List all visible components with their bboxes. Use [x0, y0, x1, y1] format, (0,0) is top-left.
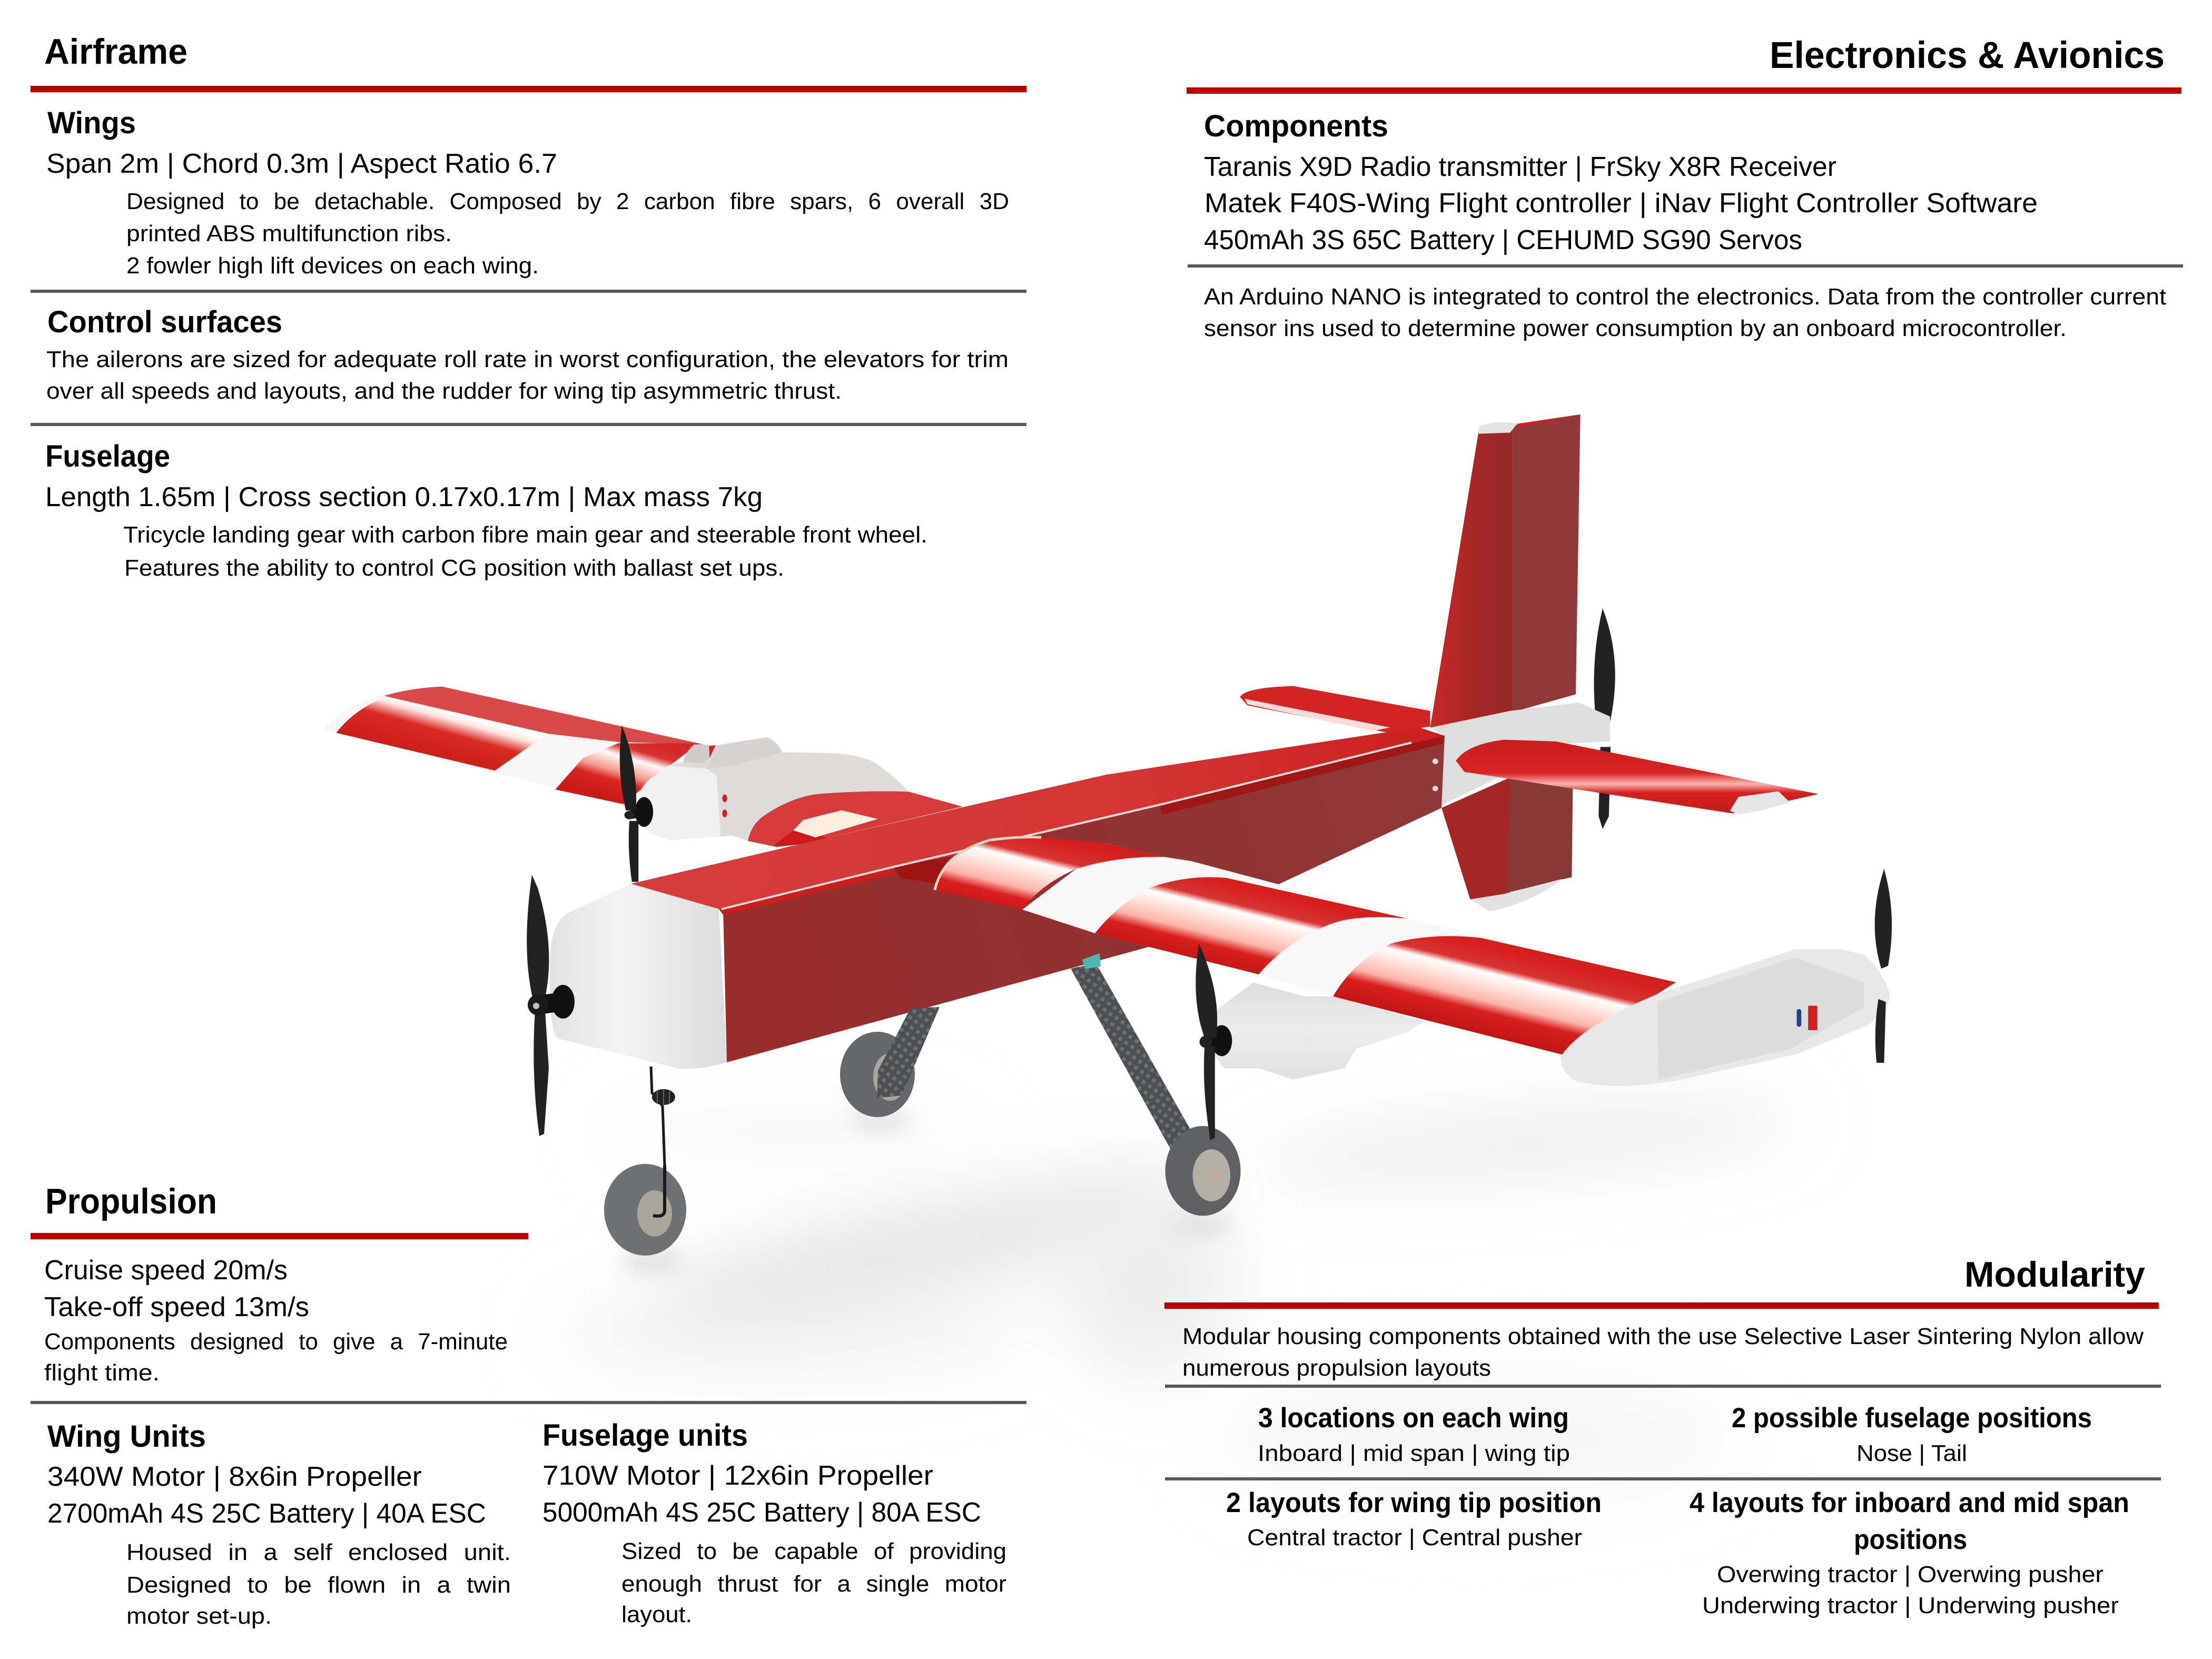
block: speeds: Components designed to give a 7-minute: [44, 1329, 508, 1355]
block: fuselage: [45, 439, 927, 581]
vertical fin: [1430, 414, 1581, 912]
block: wings: Span 2m | Chord 0.3m | Aspect Ratio 6.7: [46, 149, 557, 179]
block: inboard layouts: Overwing tractor | Overwing pusher: [1717, 1562, 2104, 1587]
block: wing tip layouts: 2 layouts for wing tip position: [1226, 1487, 1602, 1518]
block: fuselage positions: [1732, 1403, 2092, 1466]
tail propeller: [1594, 608, 1615, 829]
fuselage top and wing centre: [631, 727, 1445, 915]
block: wing units: Housed in a self enclosed unit.: [126, 1539, 511, 1565]
heading: Modularity: Modularity: [1964, 1255, 2145, 1295]
far wing: [323, 687, 704, 804]
panel: electronics and avionics: [1187, 35, 2183, 341]
block: wing units: 340W Motor | 8x6in Propeller: [47, 1461, 422, 1492]
block: arduino note: [1204, 284, 2166, 341]
block: wing tip layouts: [1226, 1487, 1602, 1551]
inboard engine pod: [1196, 944, 1425, 1140]
block: wings: [46, 106, 1009, 279]
block: speeds: Take-off speed 13m/s: [44, 1292, 309, 1322]
red divider: airframe: [31, 86, 1026, 92]
panel: modularity: [1164, 1255, 2161, 1618]
wing tip engine pod: [1561, 869, 1892, 1086]
block: wing units: Wing Units: [47, 1419, 206, 1454]
block: fuselage positions: Nose | Tail: [1856, 1440, 1967, 1466]
block: wing units: [47, 1419, 511, 1629]
block: speeds: [44, 1255, 508, 1386]
tail boom: [1430, 703, 1610, 805]
block: fuselage positions: 2 possible fuselage positions: [1732, 1403, 2092, 1434]
block: components: [1204, 109, 2038, 255]
red divider: modularity: [1164, 1302, 2159, 1309]
block: fuselage: Fuselage: [45, 439, 170, 473]
block: control surfaces: The ailerons are sized for adequate roll rate in worst configuration, the elevators for trim: [46, 347, 1009, 372]
block: wing units: motor set-up.: [126, 1603, 272, 1629]
nose cone: [550, 884, 727, 1069]
panel: airframe: [31, 32, 1026, 581]
block: fuselage units: layout.: [621, 1602, 692, 1627]
nose wheel: [604, 1164, 686, 1256]
near tail stabilizer: [1456, 740, 1819, 815]
panel: propulsion: [31, 1181, 1026, 1629]
nose propeller: [527, 875, 575, 1136]
block: inboard layouts: 4 layouts for inboard and mid span: [1690, 1487, 2129, 1518]
block: control surfaces: over all speeds and layouts, and the rudder for wing tip asymmetric thrust.: [46, 378, 842, 404]
block: modular intro: [1182, 1324, 2144, 1381]
block: inboard layouts: positions: [1854, 1524, 1967, 1555]
aircraft render: [323, 414, 1892, 1256]
far wing propeller: [620, 725, 644, 882]
block: arduino note: An Arduino NANO is integrated to control the electronics. Data from the controller current: [1204, 284, 2166, 310]
block: wing locations: 3 locations on each wing: [1258, 1403, 1569, 1434]
block: fuselage: Tricycle landing gear with carbon fibre main gear and steerable front wheel.: [123, 522, 927, 548]
block: modular intro: numerous propulsion layouts: [1182, 1355, 1491, 1381]
block: wings: Wings: [47, 106, 136, 140]
block: fuselage units: enough thrust for a single motor: [621, 1571, 1006, 1597]
block: components: Components: [1204, 109, 1388, 143]
block: wing units: 2700mAh 4S 25C Battery | 40A ESC: [47, 1498, 486, 1529]
heading: Propulsion: Propulsion: [45, 1181, 217, 1221]
block: fuselage: Length 1.65m | Cross section 0.17x0.17m | Max mass 7kg: [45, 482, 763, 512]
block: speeds: flight time.: [44, 1360, 160, 1386]
far wing engine pod and root: [635, 737, 963, 847]
block: arduino note: sensor ins used to determine power consumption by an onboard microcontroller.: [1204, 315, 2067, 341]
block: wing locations: Inboard | mid span | wing tip: [1258, 1440, 1570, 1466]
near main landing gear: [1071, 953, 1241, 1216]
red divider: electronics: [1187, 87, 2181, 94]
block: fuselage units: [542, 1418, 1006, 1627]
block: inboard layouts: [1690, 1487, 2129, 1618]
block: wings: Designed to be detachable. Composed by 2 carbon fibre spars, 6 overall 3D: [126, 189, 1009, 214]
block: control surfaces: Control surfaces: [47, 305, 282, 339]
block: components: Taranis X9D Radio transmitter | FrSky X8R Receiver: [1204, 152, 1836, 182]
block: components: 450mAh 3S 65C Battery | CEHUMD SG90 Servos: [1204, 225, 1802, 255]
main wheel: [1165, 1126, 1241, 1216]
block: fuselage units: Fuselage units: [542, 1418, 748, 1453]
block: speeds: Cruise speed 20m/s: [44, 1255, 288, 1286]
block: fuselage units: Sized to be capable of providing: [621, 1538, 1006, 1564]
heading: Electronics & Avionics: Electronics & Avionics: [1770, 35, 2165, 76]
rear wheel far side: [840, 1007, 940, 1117]
block: fuselage units: 5000mAh 4S 25C Battery | 80A ESC: [542, 1497, 981, 1528]
block: wings: 2 fowler high lift devices on each wing.: [126, 253, 539, 279]
far tail stabilizer: [1240, 686, 1430, 733]
block: fuselage: Features the ability to control CG position with ballast set ups.: [124, 555, 784, 581]
heading: Airframe: Airframe: [44, 32, 187, 72]
block: wings: printed ABS multifunction ribs.: [126, 221, 452, 246]
fuselage side: [723, 736, 1445, 1062]
block: modular intro: Modular housing components obtained with the use Selective Laser Sintering Nylon allow: [1182, 1324, 2144, 1349]
block: wing locations: [1258, 1403, 1570, 1466]
block: control surfaces: [46, 305, 1009, 404]
fuselage screws: [1433, 758, 1438, 791]
block: components: Matek F40S-Wing Flight controller | iNav Flight Controller Software: [1204, 188, 2038, 219]
block: inboard layouts: Underwing tractor | Underwing pusher: [1702, 1593, 2119, 1618]
near wing: [935, 837, 1676, 1054]
nose landing gear: [651, 1066, 675, 1211]
block: wing units: Designed to be flown in a twin: [126, 1572, 511, 1598]
ground shadow: [553, 1093, 1802, 1506]
block: wing tip layouts: Central tractor | Central pusher: [1247, 1525, 1582, 1551]
red divider: propulsion: [31, 1233, 528, 1239]
block: fuselage units: 710W Motor | 12x6in Propeller: [542, 1460, 933, 1491]
